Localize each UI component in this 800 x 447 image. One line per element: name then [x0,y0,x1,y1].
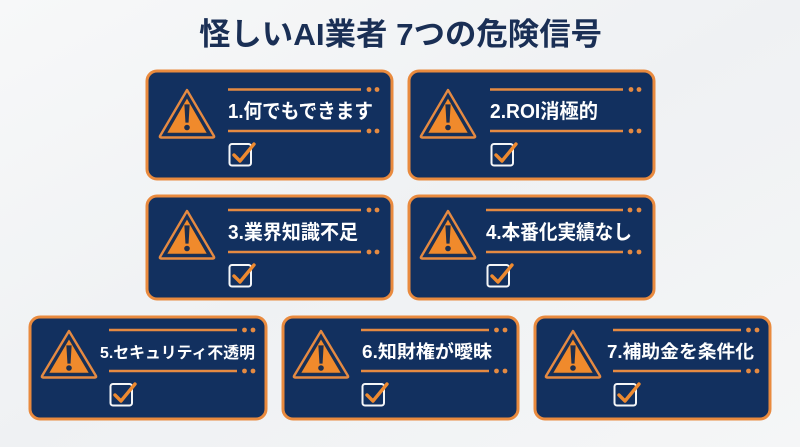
icon: warning triangle 7 [546,331,600,378]
bottom rule 6 [361,369,507,373]
icon: checkbox 1 [230,144,254,166]
top rule 5 [109,328,255,332]
icon: checkbox 4 [488,265,512,286]
top rule 7 [613,328,759,332]
bottom rule 5 [109,369,255,373]
icon: warning triangle 3 [160,211,214,258]
icon: warning triangle 6 [294,331,348,378]
icon: checkbox 5 [110,384,135,406]
icon: warning triangle 2 [421,90,475,138]
bottom rule 2 [490,129,641,133]
label 3: 3.業界知識不足 [228,221,358,244]
title: 怪しいAI業者 7つの危険信号 [199,17,602,52]
bottom rule 1 [228,129,379,133]
label 4: 4.本番化実績なし [486,221,632,244]
icon: checkbox 2 [492,144,516,166]
panel: signal 1 [147,71,392,179]
label 6: 6.知財権が曖昧 [362,341,492,362]
top rule 3 [228,208,379,212]
bottom rule 7 [613,369,759,373]
label 5: 5.セキュリティ不透明 [100,344,255,362]
top rule 6 [361,328,507,332]
label 1: 1.何でもできます [228,100,373,123]
label 7: 7.補助金を条件化 [607,342,754,362]
bottom rule 4 [486,250,641,254]
top rule 2 [490,87,641,92]
panel: signal 4 [409,196,654,299]
icon: warning triangle 4 [421,211,475,258]
icon: warning triangle 1 [160,90,214,138]
icon: checkbox 3 [230,265,254,286]
panel: signal 6 [283,317,518,419]
label 2: 2.ROI消極的 [490,100,598,123]
icon: warning triangle 5 [42,331,96,378]
panel: signal 7 [535,317,770,419]
panel: signal 3 [147,196,392,299]
icon: checkbox 6 [362,384,387,406]
top rule 1 [228,87,379,92]
top rule 4 [486,208,641,212]
bottom rule 3 [228,250,379,254]
panel: signal 2 [409,71,654,179]
icon: checkbox 7 [614,384,639,406]
panel: signal 5 [30,317,266,419]
